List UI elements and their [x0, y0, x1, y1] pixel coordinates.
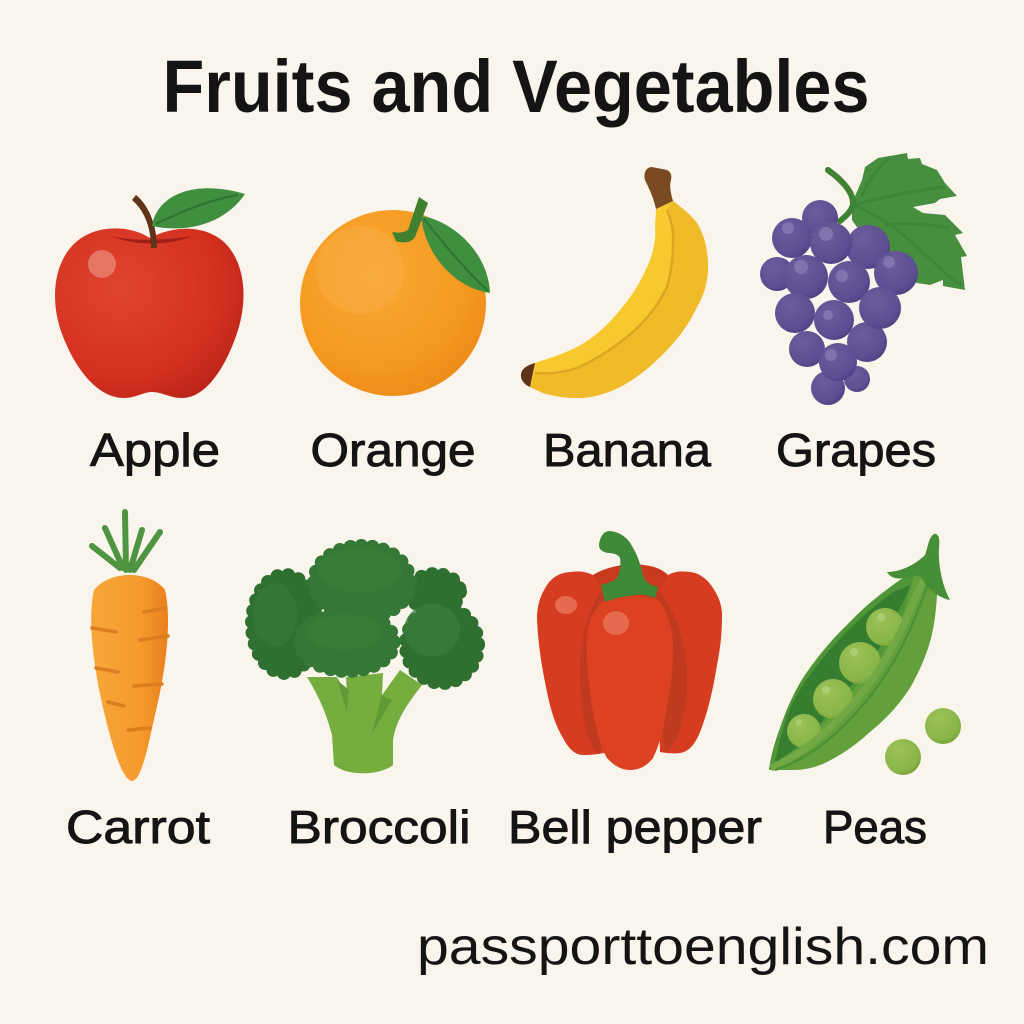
website credit: passporttoenglish.com — [417, 918, 989, 976]
label: Broccoli: Broccoli — [288, 801, 470, 853]
label: Grapes: Grapes — [776, 424, 936, 476]
label: Apple: Apple — [90, 424, 220, 476]
icon: carrot — [91, 512, 168, 781]
label: Banana: Banana — [543, 424, 711, 476]
title: Fruits and Vegetables — [162, 45, 870, 128]
icon: broccoli — [252, 546, 478, 773]
label: Carrot: Carrot — [66, 801, 210, 853]
icon: banana — [521, 167, 708, 398]
icon: orange — [300, 197, 490, 396]
icon: peas — [769, 534, 961, 775]
icon: bell pepper — [537, 531, 722, 770]
icon: grapes — [760, 153, 967, 405]
label: Peas: Peas — [823, 801, 927, 853]
icon: apple — [55, 188, 245, 398]
label: Orange: Orange — [310, 424, 476, 476]
label: Bell pepper: Bell pepper — [508, 801, 762, 853]
